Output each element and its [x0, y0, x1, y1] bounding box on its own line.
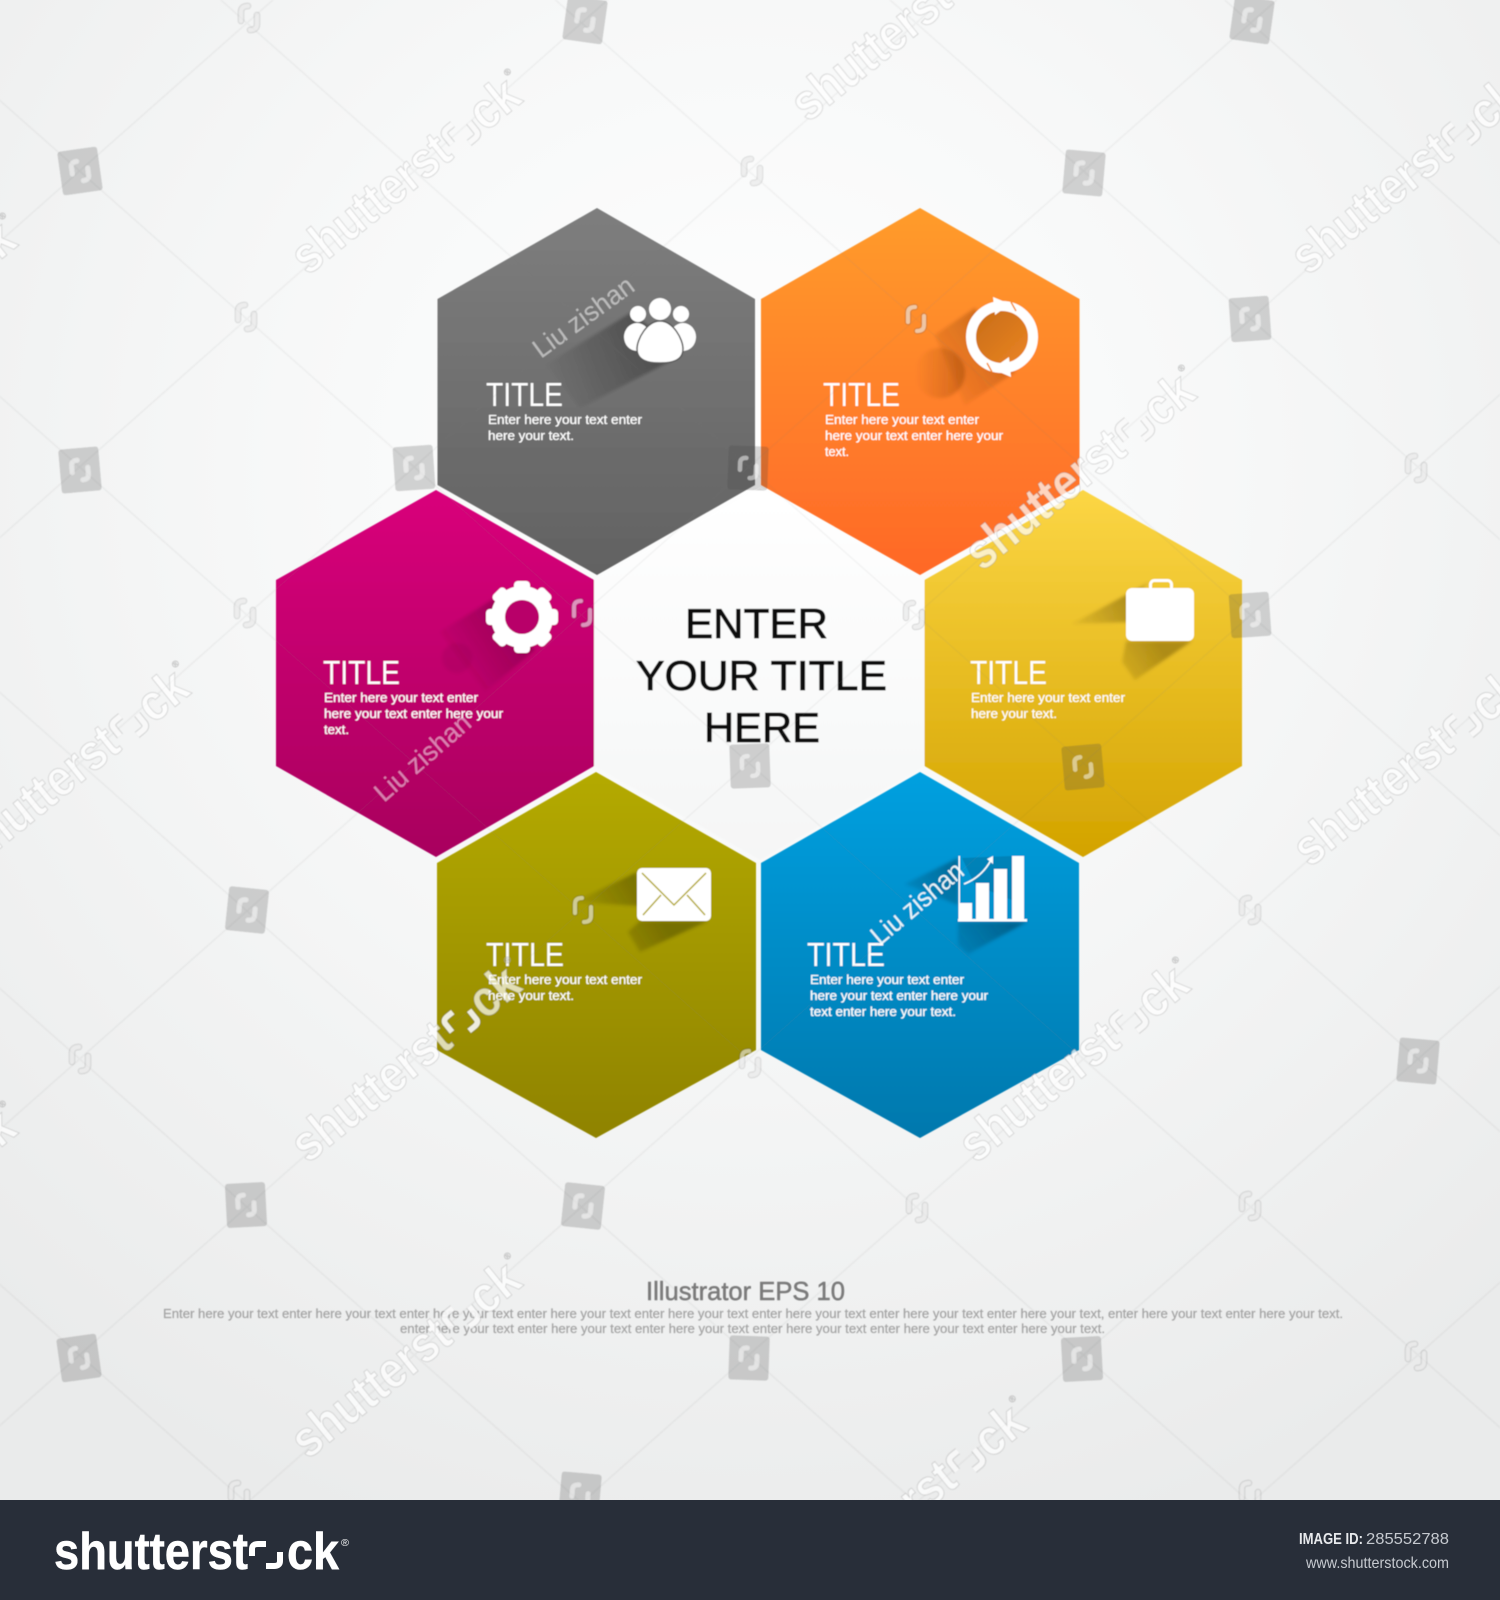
- logo: shutterstock: ck: [287, 1523, 339, 1581]
- footnote text: enter here your text enter here your text enter here your text enter here your text enter here your text enter here your text.: [400, 1322, 1105, 1336]
- watermark: shutterstock stamps: ®: [1176, 362, 1187, 374]
- text: blue panel: Enter here your text enter: [810, 973, 964, 987]
- watermark: shutterstock stamps: ®: [502, 954, 513, 966]
- image id: IMAGE ID:: [1299, 1531, 1363, 1548]
- center hexagon: [594, 488, 925, 860]
- text: orange panel: Enter here your text enter: [825, 413, 979, 427]
- watermark: shutterstock stamps: shutterst: [1279, 121, 1462, 285]
- footer bar: [0, 1500, 1500, 1600]
- panel: blue chart hexagon: [761, 772, 1079, 1138]
- watermark: shutterstock stamps: ck: [456, 65, 531, 141]
- text: magenta panel: [324, 691, 503, 737]
- watermark: shutterstock stamps: ®: [502, 1250, 513, 1262]
- watermark: shutterstock stamps: shutterst: [279, 1305, 462, 1469]
- footnote heading: Illustrator EPS 10: [646, 1276, 845, 1306]
- center title: HERE: [704, 704, 820, 751]
- image id number: 285552788: [1366, 1531, 1449, 1548]
- text: magenta panel: Enter here your text enter: [324, 691, 478, 705]
- text: yellow panel: here your text.: [971, 707, 1057, 721]
- panel: orange cycle hexagon: [761, 208, 1080, 575]
- watermark: shutterstock stamps: ®: [1007, 1393, 1018, 1405]
- text: magenta panel: here your text enter here your: [324, 707, 503, 721]
- panel: olive mail hexagon: [437, 772, 756, 1138]
- watermark: shutterstock stamps: ®: [170, 658, 181, 670]
- watermark: shutterstock stamps: ck: [456, 1249, 531, 1325]
- text: blue panel: text enter here your text.: [810, 1005, 956, 1019]
- icon: cycle arrows: [971, 297, 1033, 377]
- center title: YOUR TITLE: [636, 652, 887, 699]
- text: gray panel: Enter here your text enter: [488, 413, 642, 427]
- watermark: shutterstock stamps: ck: [1130, 361, 1205, 437]
- watermark: shutterstock stamps: ck: [456, 953, 531, 1029]
- footnote text: Enter here your text enter here your text enter here your text enter here your text enter here your text enter here your text enter here your text enter here your text, enter here your text enter here your text.: [163, 1307, 1343, 1321]
- icon: briefcase: [1126, 580, 1194, 641]
- watermark: Liu zishan magenta: Liu zishan: [368, 707, 477, 808]
- title: gray panel: TITLE: [486, 376, 563, 413]
- watermark: shutterstock stamps: ®: [502, 66, 513, 78]
- panel: yellow briefcase hexagon: [924, 490, 1242, 857]
- website: www.shutterstock.com: [1305, 1555, 1449, 1572]
- watermark: shutterstock stamps: shutterst: [947, 1009, 1130, 1173]
- panel: magenta settings hexagon: [276, 490, 594, 857]
- icon: gear: [486, 581, 558, 653]
- icon: bar chart: [958, 856, 1027, 922]
- text: olive panel: here your text.: [488, 989, 574, 1003]
- watermark: Liu zishan gray: Liu zishan: [527, 270, 640, 364]
- text: orange panel: [825, 413, 1003, 459]
- text: gray panel: [488, 413, 642, 443]
- watermark: shutterstock stamps: shutterst: [279, 121, 462, 285]
- title: magenta panel: TITLE: [323, 654, 400, 691]
- watermark: shutterstock stamps: ®: [1170, 954, 1181, 966]
- watermark: shutterstock stamps: ck: [124, 657, 199, 733]
- text: orange panel: here your text enter here your: [825, 429, 1003, 443]
- text: magenta panel: text.: [324, 723, 349, 737]
- logo: shutterstock: ®: [341, 1538, 350, 1549]
- panel: gray team hexagon: [438, 208, 755, 575]
- watermark: shutterstock stamps: shutterst: [1281, 713, 1464, 877]
- text: blue panel: here your text enter here your: [810, 989, 988, 1003]
- title: olive panel: TITLE: [486, 936, 564, 973]
- watermark: shutterstock stamps: shutterst: [953, 417, 1136, 581]
- text: gray panel: here your text.: [488, 429, 574, 443]
- icon: people: [624, 298, 696, 363]
- center title: ENTER: [685, 600, 828, 647]
- watermark: shutterstock stamps: shutterst: [279, 1009, 462, 1173]
- footnote text: [163, 1307, 1343, 1336]
- text: yellow panel: [971, 691, 1125, 721]
- watermark: shutterstock stamps: ck: [961, 1392, 1036, 1468]
- text: olive panel: Enter here your text enter: [488, 973, 642, 987]
- text: blue panel: [810, 973, 988, 1019]
- watermark: Liu zishan blue: Liu zishan: [865, 856, 970, 951]
- text: orange panel: text.: [825, 445, 849, 459]
- watermark: shutterstock stamps: ck: [1124, 953, 1199, 1029]
- text: olive panel: [488, 973, 642, 1003]
- icon: envelope: [637, 868, 711, 921]
- text: yellow panel: Enter here your text enter: [971, 691, 1125, 705]
- title: orange panel: TITLE: [823, 376, 900, 413]
- logo: shutterstock: shutterst: [54, 1523, 248, 1581]
- title: yellow panel: TITLE: [970, 654, 1047, 691]
- center title: [636, 600, 887, 751]
- title: blue panel: TITLE: [807, 936, 885, 973]
